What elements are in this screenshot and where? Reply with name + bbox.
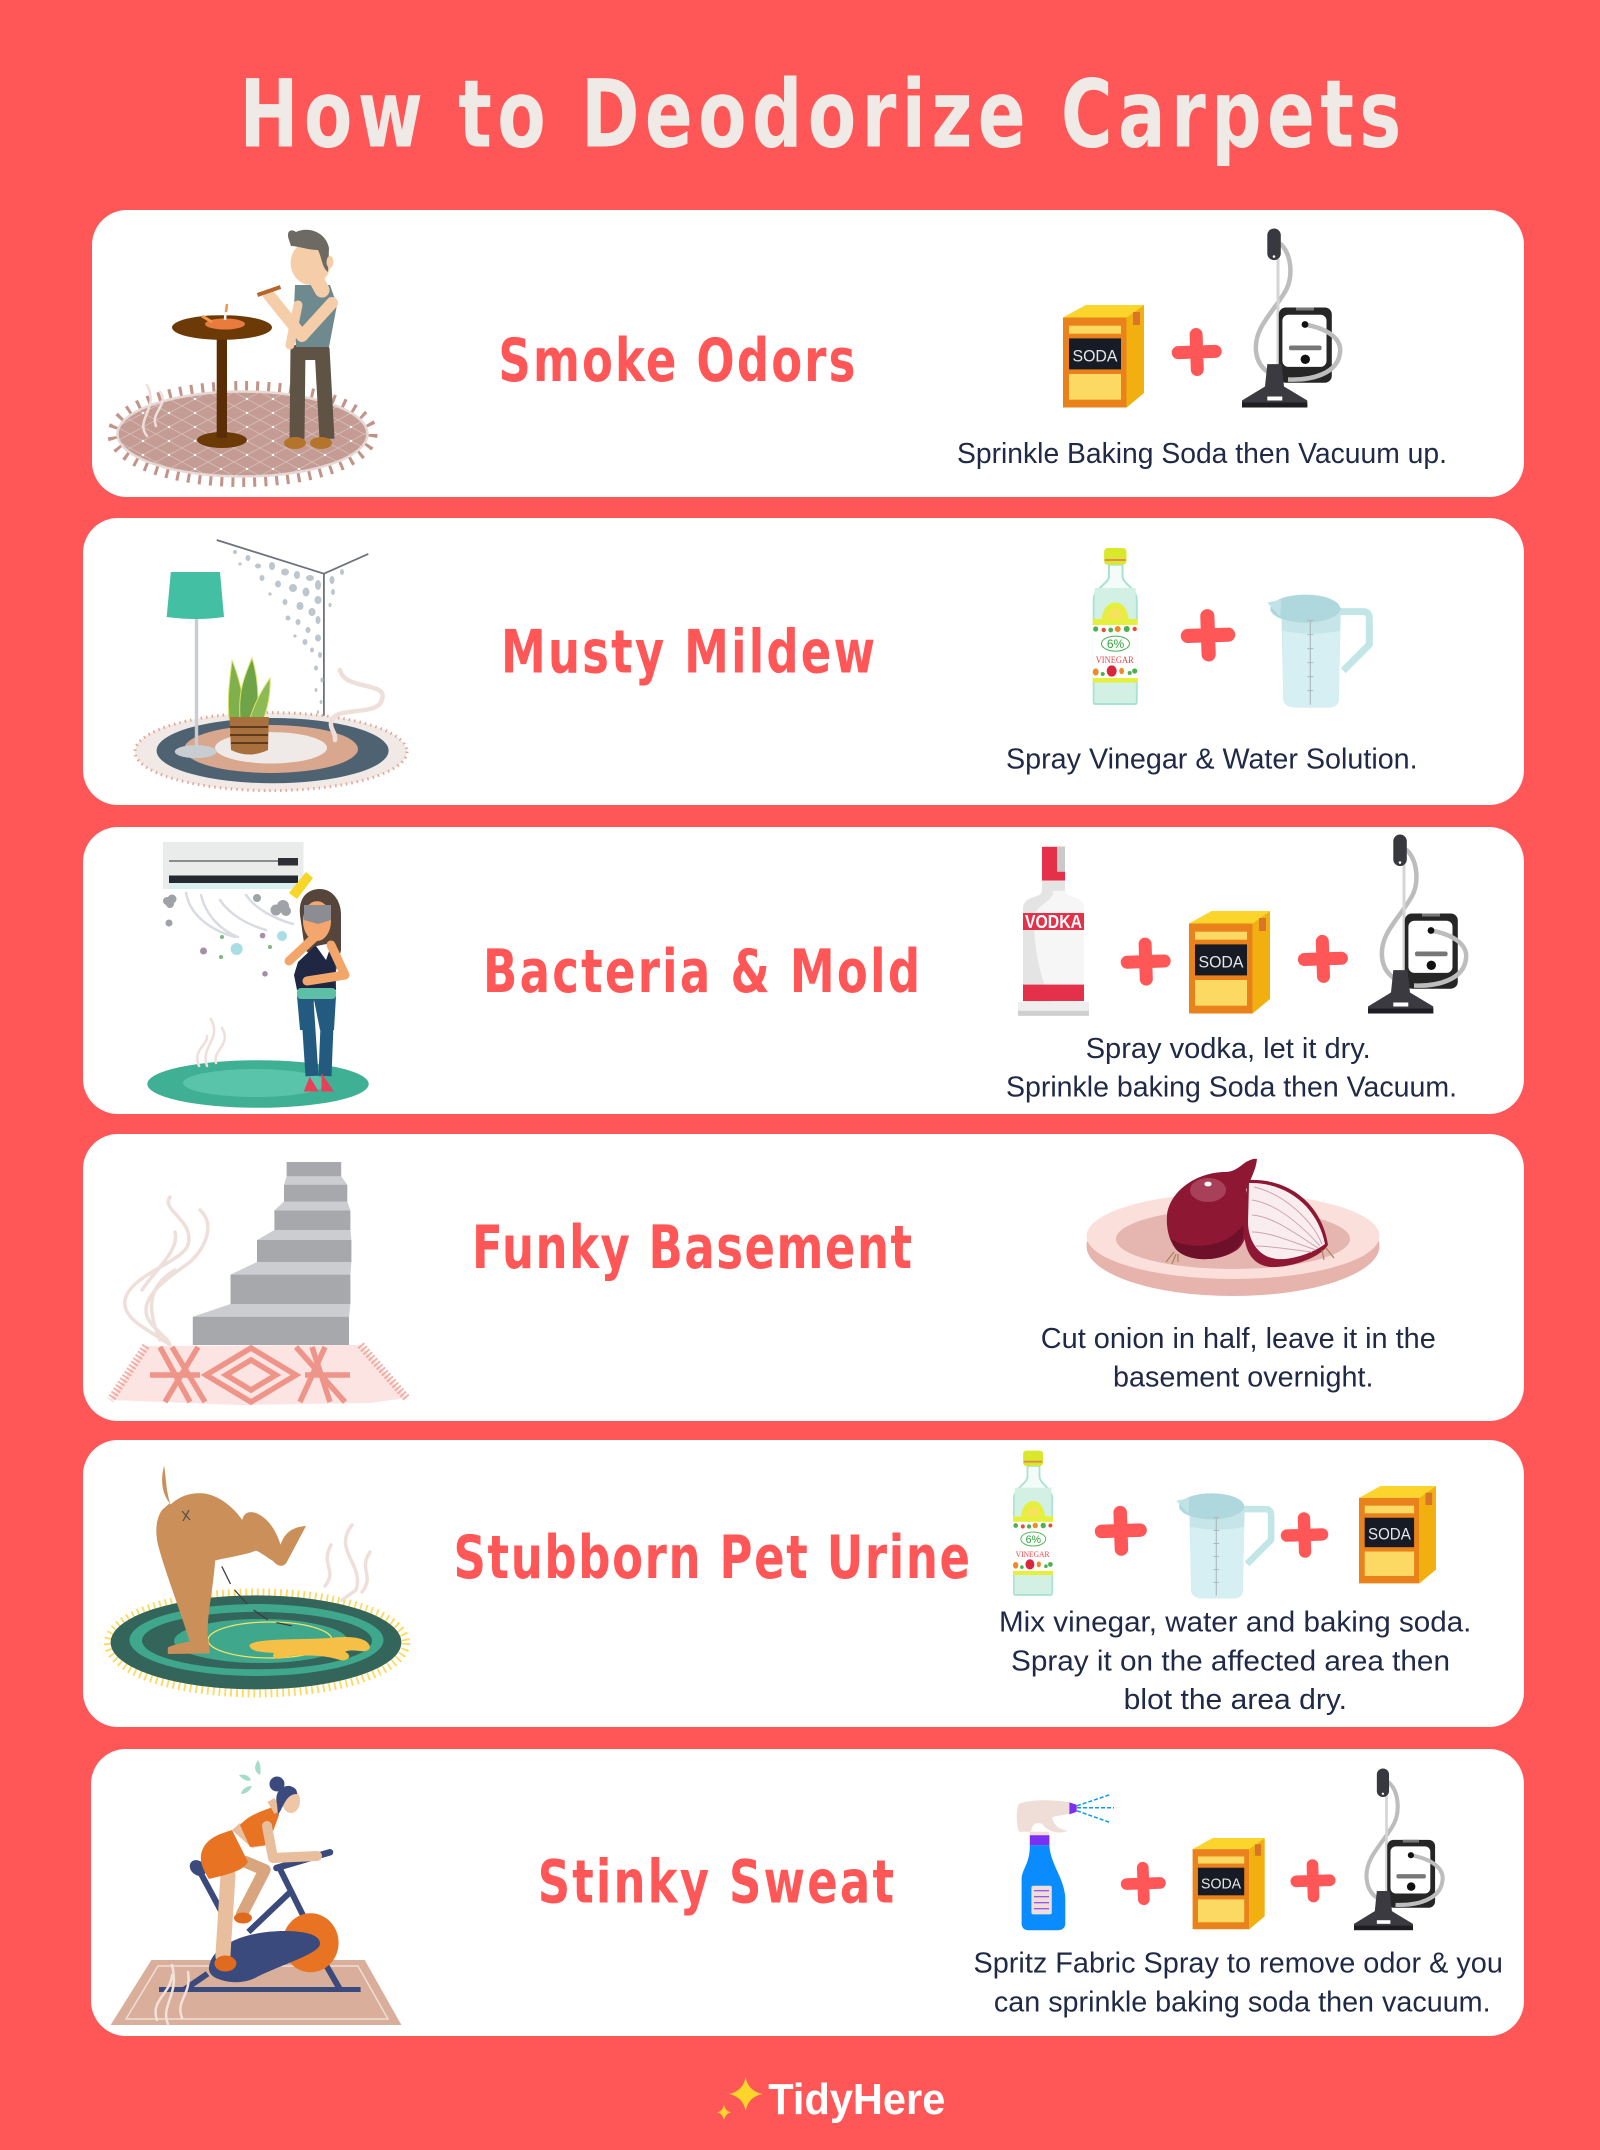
illustration: woman under air conditioner on green rug [147, 842, 369, 1108]
illustration: stairs and patterned rug [111, 1162, 406, 1405]
heading: Bacteria & Mold [483, 937, 920, 1007]
instruction text: blot the area dry. [1124, 1684, 1347, 1716]
panel: bacteria and mold [83, 827, 1524, 1114]
heading: Smoke Odors [498, 326, 855, 396]
icon: baking soda box [1189, 911, 1270, 1014]
panel: funky basement [83, 1134, 1524, 1421]
icon: baking soda box [1063, 305, 1144, 408]
heading: Stinky Sweat [538, 1847, 894, 1917]
icon: plus [1127, 1868, 1160, 1899]
illustration: mildew corner, lamp, plant and rug [135, 540, 407, 791]
icon: plus [1188, 616, 1228, 654]
icon: baking soda box: SODA [1198, 952, 1244, 972]
illustration: dog urinating on rug [108, 1466, 406, 1694]
icon: plus [1102, 1513, 1140, 1549]
heading: Musty Mildew [501, 617, 875, 687]
icon: plus [1304, 941, 1341, 976]
icon: vacuum [1368, 834, 1466, 1014]
instruction text [1006, 1033, 1457, 1103]
instruction text: Sprinkle Baking Soda then Vacuum up. [957, 438, 1447, 470]
instruction text: Mix vinegar, water and baking soda. [999, 1607, 1471, 1639]
panel: musty mildew [83, 518, 1524, 805]
panel: stubborn pet urine [83, 1440, 1524, 1727]
instruction text: Cut onion in half, leave it in the [1041, 1323, 1436, 1355]
instruction text [1041, 1323, 1436, 1393]
icon: plus [1287, 1518, 1322, 1552]
icon: vinegar bottle: 6% [1107, 637, 1125, 651]
icon: vinegar bottle: 6% [1026, 1534, 1041, 1546]
icon: vinegar bottle [1093, 548, 1138, 704]
icon: measuring jug of water [1176, 1493, 1271, 1598]
panel: smoke odors [92, 210, 1524, 497]
icon: plus [1296, 1865, 1330, 1897]
panel: stinky sweat [91, 1749, 1524, 2036]
instruction text: Spritz Fabric Spray to remove odor & you [974, 1948, 1503, 1980]
icon: baking soda box [1193, 1838, 1265, 1929]
instruction text: Spray Vinegar & Water Solution. [1006, 744, 1418, 776]
heading: Stubborn Pet Urine [454, 1523, 970, 1593]
icon: plus [1127, 944, 1164, 979]
icon: vinegar bottle: VINEGAR [1016, 1550, 1050, 1559]
illustration: woman on exercise bike on rug [111, 1760, 401, 2025]
instruction text: Spray vodka, let it dry. [1086, 1033, 1371, 1065]
icon: measuring jug of water [1267, 595, 1369, 708]
icon: baking soda box [1359, 1486, 1436, 1583]
icon: vodka bottle [1018, 847, 1089, 1016]
icon: vinegar bottle [1013, 1451, 1053, 1595]
icon: plus [1178, 334, 1215, 370]
illustration: man smoking on round rug [114, 230, 372, 481]
icon: baking soda box: SODA [1072, 346, 1118, 366]
icon: vacuum [1354, 1768, 1443, 1930]
logo: TidyHere: TidyHere [768, 2075, 945, 2124]
icon: vodka bottle: VODKA [1025, 912, 1082, 932]
icon: spray bottle [1017, 1794, 1114, 1930]
instruction text: can sprinkle baking soda then vacuum. [994, 1986, 1491, 2018]
icon: baking soda box: SODA [1368, 1526, 1411, 1544]
illustration: halved red onion on plate [1086, 1159, 1380, 1296]
icon: baking soda box: SODA [1201, 1875, 1242, 1892]
instruction text: Spray it on the affected area then [1011, 1645, 1450, 1677]
title: How to Deodorize Carpets [240, 60, 1401, 169]
instruction text: basement overnight. [1113, 1361, 1374, 1393]
instruction text [999, 1607, 1471, 1716]
icon: vinegar bottle: VINEGAR [1096, 655, 1134, 665]
heading: Funky Basement [472, 1212, 912, 1283]
icon: vacuum [1242, 228, 1340, 408]
instruction text [974, 1948, 1503, 2018]
instruction text: Sprinkle baking Soda then Vacuum. [1006, 1071, 1457, 1103]
